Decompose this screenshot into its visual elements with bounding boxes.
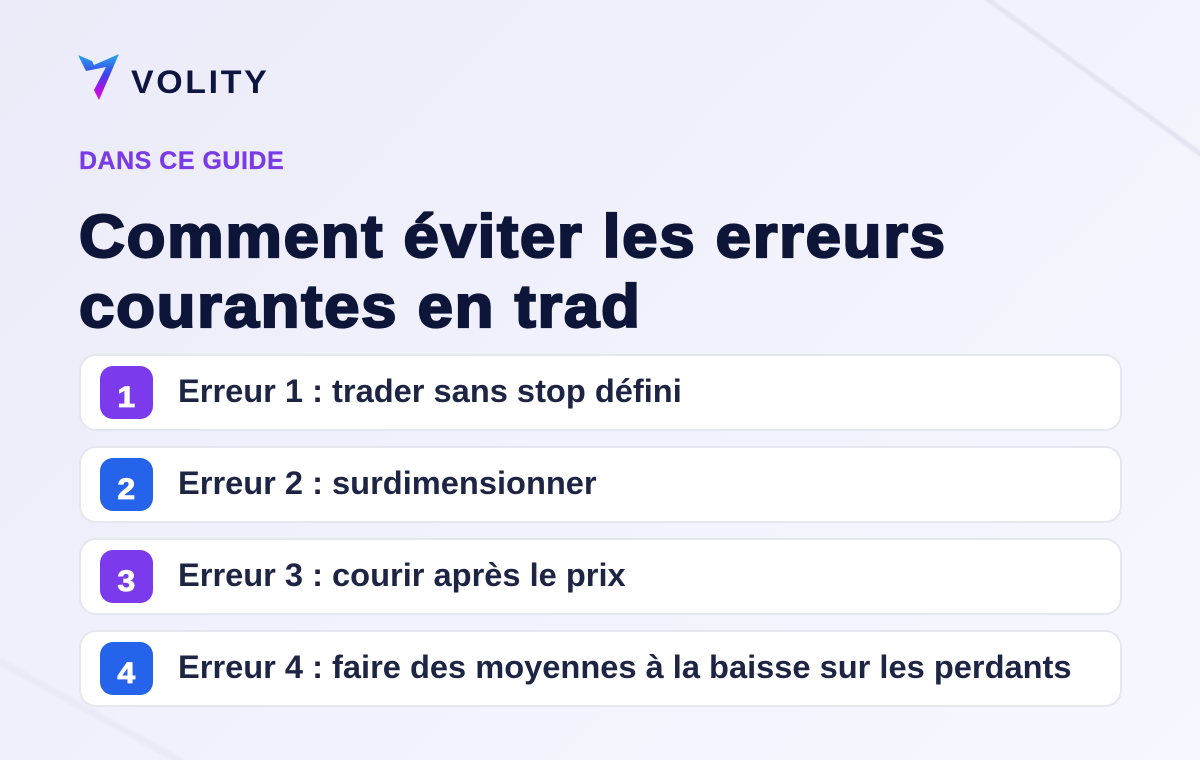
title: Comment éviter les erreurs	[79, 203, 947, 270]
text: error 1: Erreur 1 : trader sans stop défini	[178, 372, 682, 409]
wordmark: VOLITY	[131, 64, 269, 100]
card: error 2	[79, 446, 1122, 523]
icon: Volity mark	[78, 54, 119, 100]
card: error 3	[79, 538, 1122, 615]
badge 1	[100, 366, 153, 419]
badge 4	[100, 642, 153, 695]
title	[79, 203, 947, 340]
badge 3	[100, 550, 153, 603]
text: error 2: Erreur 2 : surdimensionner	[178, 464, 597, 501]
badge 2	[100, 458, 153, 511]
text: error 3: Erreur 3 : courir après le prix	[178, 556, 626, 593]
badge 1: 1	[118, 381, 135, 414]
badge 2: 2	[118, 473, 135, 506]
eyebrow: DANS CE GUIDE	[79, 147, 284, 175]
logo: Volity	[78, 54, 269, 100]
title: courantes en trad	[79, 273, 642, 340]
badge 4: 4	[118, 657, 135, 690]
card: error 1	[79, 354, 1122, 431]
card: error 4	[79, 630, 1122, 707]
text: error 4: Erreur 4 : faire des moyennes à la baisse sur les perdants	[178, 648, 1072, 685]
badge 3: 3	[118, 565, 135, 598]
